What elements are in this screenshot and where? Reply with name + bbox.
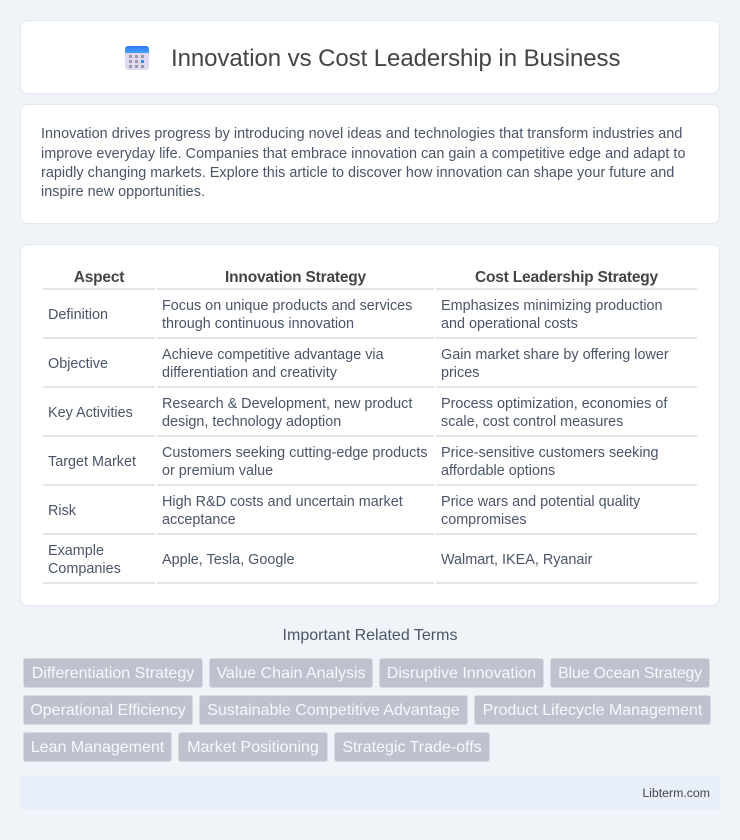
intro text: improve everyday life. Companies that embrace innovation can gain a competitive edge and adapt to [41, 146, 685, 162]
icon: calendar grid [125, 46, 149, 70]
row: example companies: Apple, Tesla, Google [162, 552, 295, 568]
row: target market: Target Market [48, 454, 136, 470]
table header: cost leadership strategy: Cost Leadership Strategy [475, 269, 658, 286]
row: key activities [48, 396, 668, 430]
related terms tags: Sustainable Competitive Advantage [207, 702, 460, 719]
row: example companies: Walmart, IKEA, Ryanair [441, 552, 592, 568]
intro text [41, 126, 685, 200]
row: example companies: Example [48, 543, 104, 559]
row: key activities: design, technology adoption [162, 414, 341, 430]
row: example companies [48, 543, 592, 577]
related terms tags: Market Positioning [187, 739, 319, 756]
related terms tags: Disruptive Innovation [387, 665, 536, 682]
footer: Libterm.com [642, 786, 710, 800]
footer [20, 776, 720, 810]
table header: innovation strategy: Innovation Strategy [225, 269, 366, 286]
intro text: Innovation drives progress by introducing novel ideas and technologies that transform industries and [41, 126, 682, 142]
row: key activities: Key Activities [48, 405, 133, 421]
related terms heading: Important Related Terms [283, 627, 457, 644]
row: objective: Objective [48, 356, 108, 372]
row: definition: Definition [48, 307, 108, 323]
related terms tags [23, 658, 711, 762]
related terms tags: Blue Ocean Strategy [558, 665, 702, 682]
row: definition: Focus on unique products and services [162, 298, 412, 314]
title: Innovation vs Cost Leadership in Business [171, 45, 620, 72]
related terms tags: Value Chain Analysis [216, 665, 366, 682]
row: objective: Achieve competitive advantage via [162, 347, 384, 363]
panel: comparison table [20, 244, 720, 606]
row: definition: and operational costs [441, 316, 578, 332]
related terms tags: Lean Management [31, 739, 164, 756]
intro text: rapidly changing markets. Explore this article to discover how innovation can shape your future and [41, 165, 674, 181]
row: objective [48, 347, 669, 381]
related terms tags: Differentiation Strategy [32, 665, 194, 682]
row: risk: compromises [441, 512, 527, 528]
row: example companies: Companies [48, 561, 121, 577]
row: target market [48, 445, 659, 479]
header card [20, 20, 720, 94]
row: objective: prices [441, 365, 479, 381]
row: objective: differentiation and creativity [162, 365, 337, 381]
row: key activities: Research & Development, new product [162, 396, 412, 412]
intro text: inspire new opportunities. [41, 184, 205, 200]
row: definition [48, 298, 663, 332]
row: objective: Gain market share by offering lower [441, 347, 669, 363]
table header: aspect: Aspect [74, 269, 124, 286]
row: target market: Customers seeking cutting-edge products [162, 445, 428, 461]
row: risk: Risk [48, 503, 76, 519]
row: risk: acceptance [162, 512, 236, 528]
row: target market: affordable options [441, 463, 555, 479]
related terms tags: Strategic Trade-offs [342, 739, 482, 756]
row: definition: through continuous innovation [162, 316, 354, 332]
row: key activities: Process optimization, economies of [441, 396, 667, 412]
related terms tags: Product Lifecycle Management [483, 702, 702, 719]
row: key activities: scale, cost control measures [441, 414, 623, 430]
row: risk: High R&D costs and uncertain market [162, 494, 403, 510]
row: definition: Emphasizes minimizing production [441, 298, 663, 314]
row: risk: Price wars and potential quality [441, 494, 640, 510]
row: target market: Price-sensitive customers seeking [441, 445, 659, 461]
related terms tags: Operational Efficiency [30, 702, 186, 719]
row: target market: or premium value [162, 463, 273, 479]
panel: introduction [20, 104, 720, 224]
row: risk [48, 494, 640, 528]
